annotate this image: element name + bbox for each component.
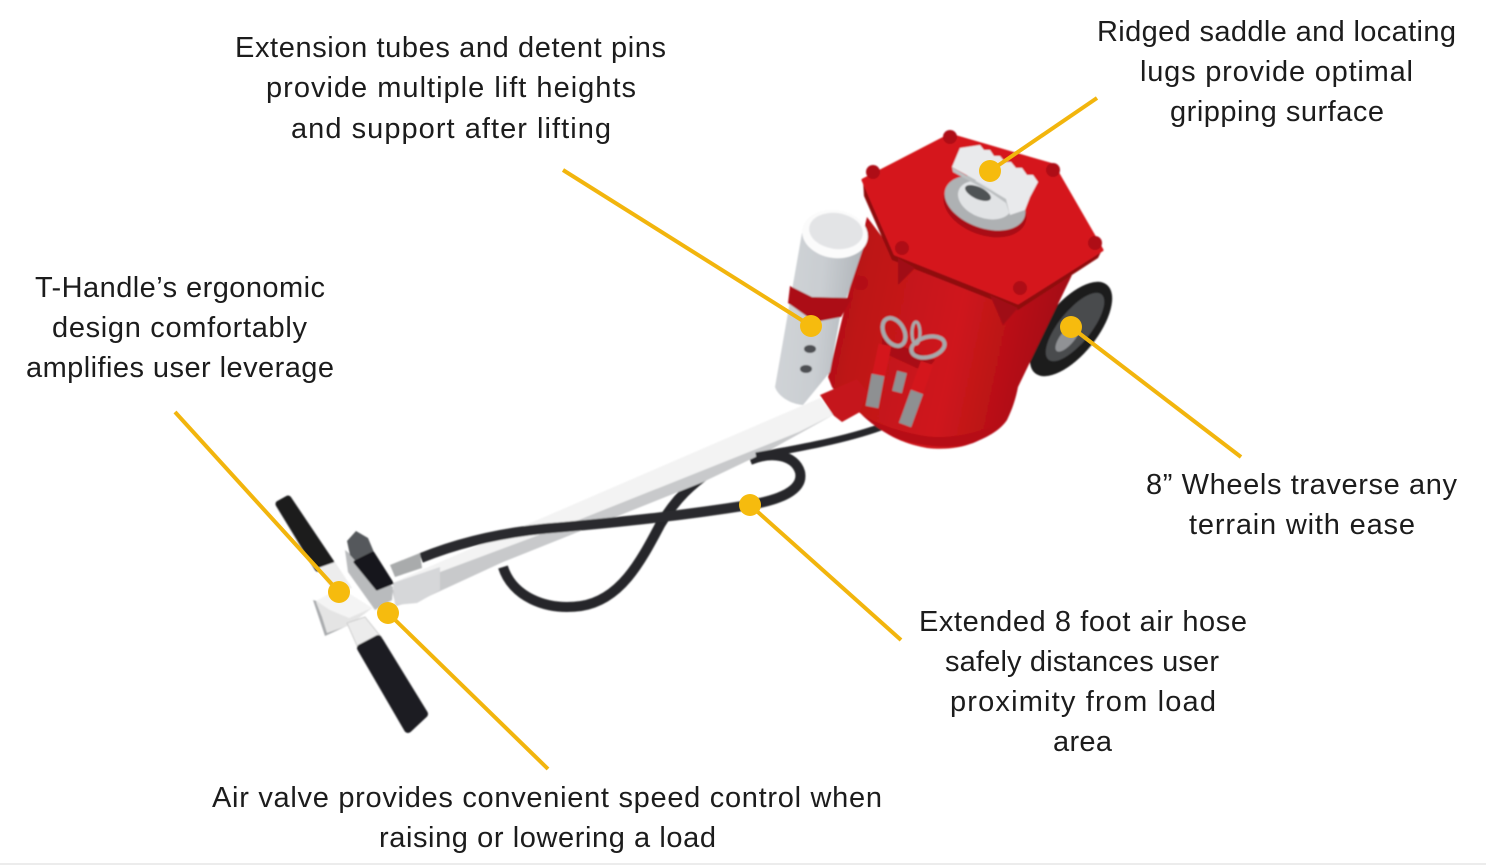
lower handle tube [347,617,382,648]
hexagonal top plate [863,135,1102,303]
lower grip [361,639,424,729]
callout: extension tubes leader [563,170,822,337]
tube band [788,286,852,322]
air hose front run [421,505,749,558]
callout: T-handle leader [175,412,350,603]
base flange [862,415,1007,446]
text: air valve [212,782,882,854]
text: wheels: 8” Wheels traverse any [1146,469,1458,501]
tube holes [800,345,816,373]
callout: wheels leader [1060,316,1241,457]
hose fitting [390,553,422,577]
text: extension tubes: and support after lifting [291,113,611,145]
air valve [345,531,393,610]
handle arm [392,398,833,606]
text: air valve: raising or lowering a load [379,822,716,854]
text: extension tubes [235,32,666,145]
upper handle tube [318,562,352,592]
extension tube mount [854,276,868,290]
text: air hose: area [1053,726,1113,758]
plate gussets [898,258,1018,325]
extension tube [775,206,871,405]
text: air hose: Extended 8 foot air hose [919,606,1247,638]
text: ridged saddle: lugs provide optimal [1140,56,1413,88]
saddle collar [935,165,1035,248]
callout: air hose leader [739,494,901,640]
text: air hose [919,606,1247,758]
air hose rear loop [503,455,800,607]
handle block [313,588,372,636]
upper grip [279,499,331,568]
text: air hose: proximity from load [950,686,1216,718]
text: air hose: safely distances user [945,646,1219,678]
text: wheels: terrain with ease [1189,509,1415,541]
arm bracket [820,379,868,422]
text: T-handle [26,272,334,384]
text: T-handle: design comfortably [52,312,308,344]
text: extension tubes: provide multiple lift heights [266,72,636,104]
jack body [828,217,1072,449]
ridged saddle [952,145,1038,215]
callout: air valve leader [377,602,548,769]
text: extension tubes: Extension tubes and detent pins [235,32,666,64]
top plate side [863,180,1102,310]
air jack product photo [279,130,1127,729]
hose to jack [756,427,881,456]
text: air valve: Air valve provides convenient speed control when [212,782,882,814]
wheel [1015,268,1127,390]
top plate bolts [866,130,1102,295]
text: T-handle: amplifies user leverage [26,352,334,384]
callout: ridged saddle leader [979,98,1097,182]
text: ridged saddle: Ridged saddle and locating [1097,16,1456,48]
detent pins [872,314,947,425]
text: wheels [1146,469,1458,541]
text: ridged saddle [1097,16,1456,128]
text: T-handle: T-Handle’s ergonomic [35,272,325,304]
text: ridged saddle: gripping surface [1170,96,1384,128]
